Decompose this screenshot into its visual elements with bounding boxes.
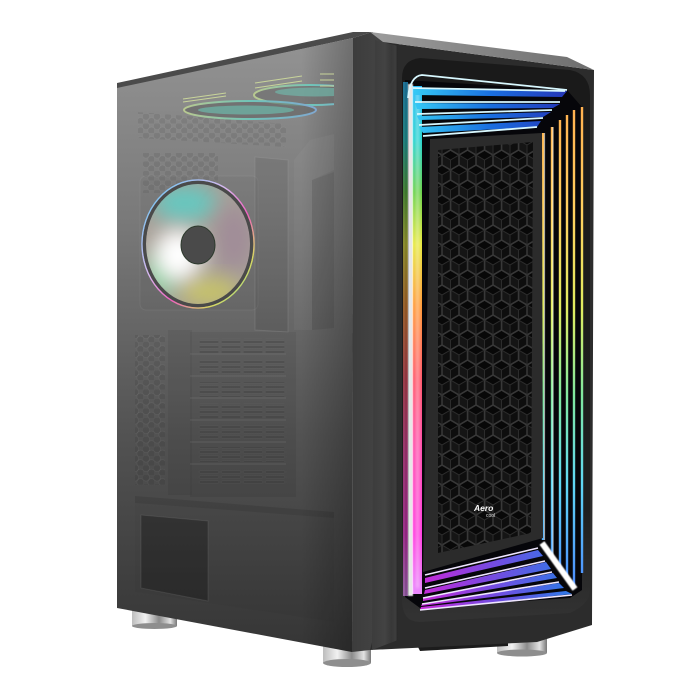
left rgb light strip	[403, 82, 422, 596]
panel: tempered glass side	[117, 32, 372, 652]
psu window	[141, 515, 208, 601]
bottom tab	[418, 642, 508, 651]
bottom fins	[420, 548, 572, 610]
panel: front face	[370, 42, 594, 650]
illustration: RGB PC tower case	[117, 32, 594, 667]
fan mounting frame	[140, 176, 258, 310]
recessed bezel	[402, 58, 590, 622]
hexagonal front mesh	[438, 142, 533, 553]
icon: rgb side fan	[142, 180, 254, 308]
inner mesh frame	[423, 133, 543, 572]
psu shroud	[135, 496, 334, 622]
panel: infinity mirror lights	[403, 75, 582, 610]
interior components seen through glass	[135, 112, 334, 622]
shroud top edge	[135, 496, 334, 518]
expansion slot bracket	[168, 330, 192, 495]
logo badge: cool	[486, 513, 495, 519]
cable cutout pillar	[294, 134, 334, 330]
rear vent column	[136, 336, 161, 481]
foot: front left	[323, 645, 371, 667]
top fan rear	[253, 74, 334, 106]
foot: rear left	[132, 606, 177, 629]
foot: front right	[497, 636, 547, 656]
top cap	[370, 32, 594, 70]
top vent holes	[138, 112, 286, 147]
logo badge	[473, 503, 495, 519]
white corner glow	[542, 543, 575, 589]
motherboard cutout	[255, 157, 288, 332]
top fan front	[183, 93, 316, 119]
right fins	[543, 107, 582, 587]
logo badge: Aero	[473, 503, 493, 513]
upper rear vent holes	[143, 153, 218, 185]
top fins	[408, 75, 567, 136]
top edge of side panel	[117, 32, 372, 89]
fan hub	[181, 226, 215, 264]
mirror black interior	[405, 80, 582, 608]
cable cutout dark	[312, 176, 325, 232]
pci slot group	[190, 341, 286, 482]
panel: front left strip	[352, 32, 402, 652]
